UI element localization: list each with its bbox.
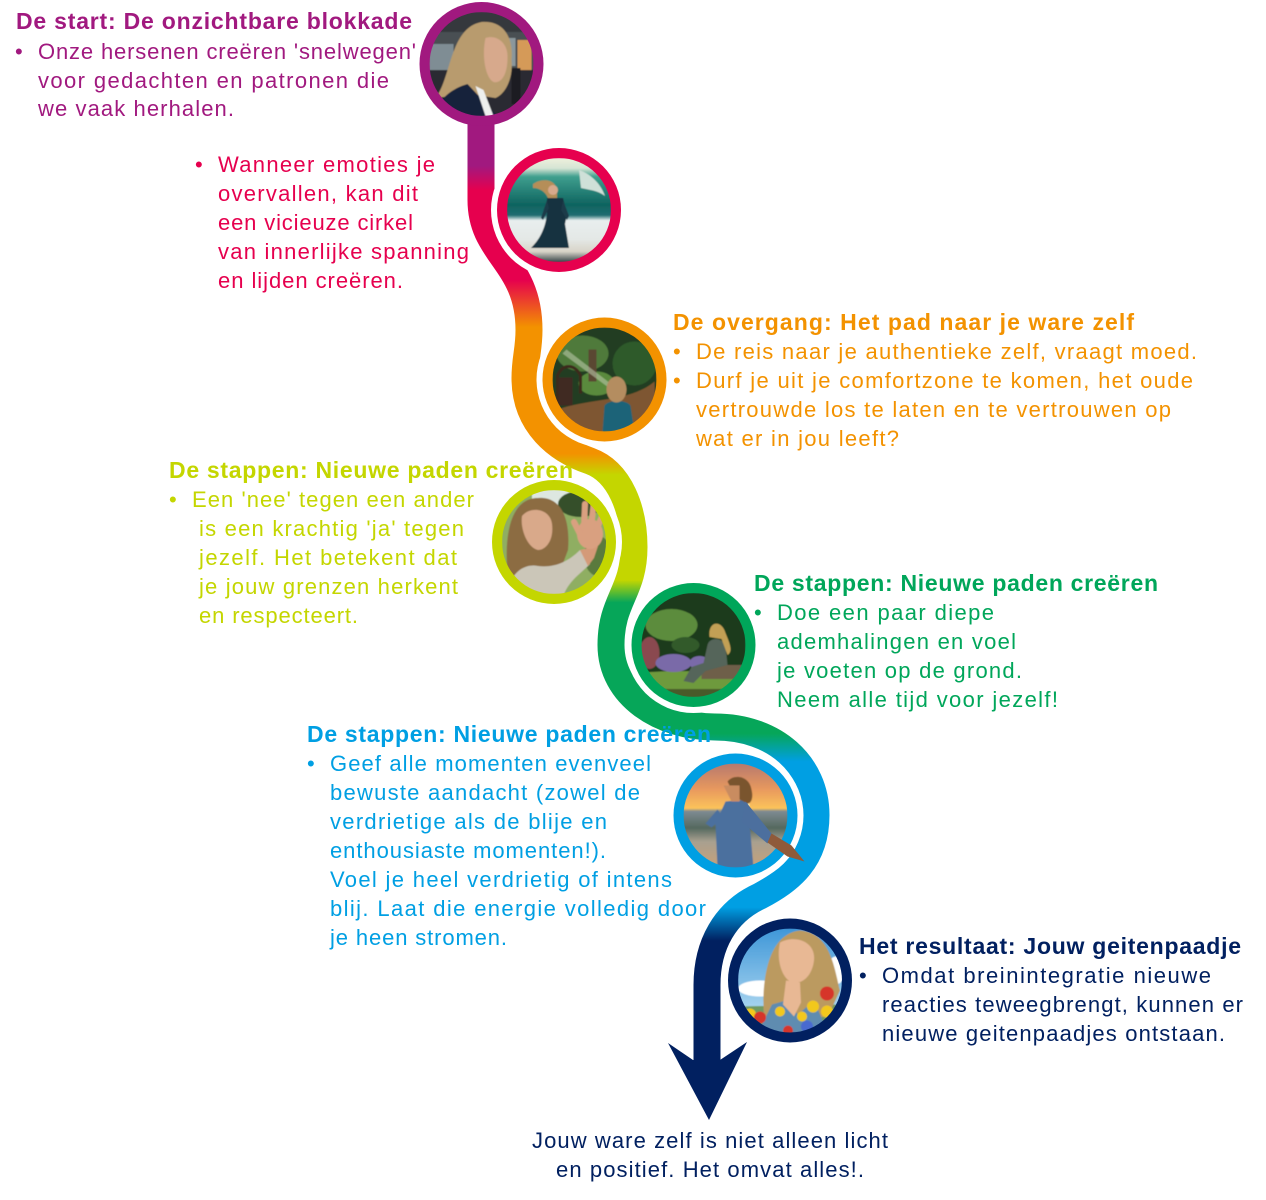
text block: Het resultaat: Omdat breinintegratie nieuwe (882, 963, 1211, 988)
photo circle 7: smiling woman with flowers (728, 918, 852, 1042)
text block: De overgang: Durf je uit je comfortzone te komen, het oude (696, 368, 1193, 393)
text block: De stappen, aandacht: • (307, 751, 315, 776)
text block: De stappen, grenzen: • (169, 487, 177, 512)
text block: De stappen, aandacht (307, 721, 711, 950)
text block: emoties: van innerlijke spanning (218, 239, 469, 264)
text block: De start: Onze hersenen creëren 'snelwegen' (38, 39, 416, 64)
text block: De stappen, grenzen: Een 'nee' tegen een ander (192, 487, 474, 512)
text block: De stappen, aandacht: De stappen: Nieuwe paden creëren (307, 721, 711, 747)
text block: De stappen, ademhalingen: ademhalingen en voel (777, 629, 1016, 654)
closing statement: en positief. Het omvat alles!. (556, 1157, 864, 1182)
text block: De stappen, grenzen: en respecteert. (199, 603, 358, 628)
text block: emoties: Wanneer emoties je (218, 152, 435, 177)
text block: Het resultaat: reacties teweegbrengt, kunnen er (882, 992, 1243, 1017)
closing statement (532, 1128, 888, 1182)
text block: De overgang: wat er in jou leeft? (695, 426, 899, 451)
text block: De stappen, ademhalingen: Doe een paar diepe (777, 600, 994, 625)
photo circle 5: woman sitting in garden (630, 583, 756, 713)
text block: De stappen, aandacht: je heen stromen. (329, 925, 507, 950)
text block: De stappen, ademhalingen: • (754, 600, 762, 625)
text block: emoties (195, 152, 469, 293)
text block: De stappen, ademhalingen: je voeten op de grond. (776, 658, 1022, 683)
text block: De overgang: • (673, 339, 681, 364)
text block: De stappen, ademhalingen: De stappen: Nieuwe paden creëren (754, 570, 1158, 596)
text block: De start: we vaak herhalen. (37, 96, 234, 121)
text block: De stappen, ademhalingen: Neem alle tijd voor jezelf! (777, 687, 1058, 712)
text block: emoties: • (195, 152, 203, 177)
text block: De stappen, grenzen: De stappen: Nieuwe paden creëren (169, 457, 573, 483)
text block: Het resultaat: nieuwe geitenpaadjes ontstaan. (882, 1021, 1225, 1046)
text block: De overgang (673, 309, 1197, 451)
text block: Het resultaat: Het resultaat: Jouw geitenpaadje (859, 933, 1241, 959)
text block: De overgang: De overgang: Het pad naar je ware zelf (673, 309, 1134, 335)
text block: Het resultaat: • (859, 963, 867, 988)
text block: emoties: overvallen, kan dit (218, 181, 418, 206)
text block: De stappen, aandacht: Voel je heel verdrietig of intens (330, 867, 672, 892)
text block: De stappen, aandacht: bewuste aandacht (zowel de (330, 780, 640, 805)
text block: De stappen, grenzen (169, 457, 573, 628)
text block: Het resultaat (859, 933, 1243, 1046)
text block: emoties: en lijden creëren. (218, 268, 403, 293)
text block: De overgang: De reis naar je authentieke zelf, vraagt moed. (696, 339, 1197, 364)
text block: De overgang: vertrouwde los te laten en te vertrouwen op (696, 397, 1171, 422)
text block: De stappen, ademhalingen (754, 570, 1158, 712)
text block: De stappen, aandacht: enthousiaste momenten!). (330, 838, 606, 863)
photo circle 4: woman raising hand (492, 480, 622, 604)
text block: emoties: een vicieuze cirkel (218, 210, 413, 235)
text block: De overgang: • (673, 368, 681, 393)
photo circle 1: woman in office (420, 2, 544, 126)
text block: De stappen, grenzen: is een krachtig 'ja' tegen (199, 516, 464, 541)
text block: De stappen, grenzen: jezelf. Het betekent dat (198, 545, 457, 570)
text block: De start: • (15, 39, 23, 64)
closing statement: Jouw ware zelf is niet alleen licht (532, 1128, 888, 1153)
photo circle 3: woman at garden gate (536, 318, 666, 446)
text block: De stappen, aandacht: Geef alle momenten evenveel (330, 751, 651, 776)
text block: De start: De start: De onzichtbare blokkade (16, 8, 412, 34)
photo circle 6: woman at sunset with open arms (674, 754, 804, 878)
text block: De stappen, aandacht: verdrietige als de blije en (330, 809, 607, 834)
text block: De start (15, 8, 416, 121)
text block: De start: voor gedachten en patronen die (38, 68, 389, 93)
winding road arrow (481, 120, 816, 1120)
photo circle 2: woman before wave (491, 148, 621, 272)
text block: De stappen, grenzen: je jouw grenzen herkent (198, 574, 458, 599)
text block: De stappen, aandacht: blij. Laat die energie volledig door (330, 896, 706, 921)
